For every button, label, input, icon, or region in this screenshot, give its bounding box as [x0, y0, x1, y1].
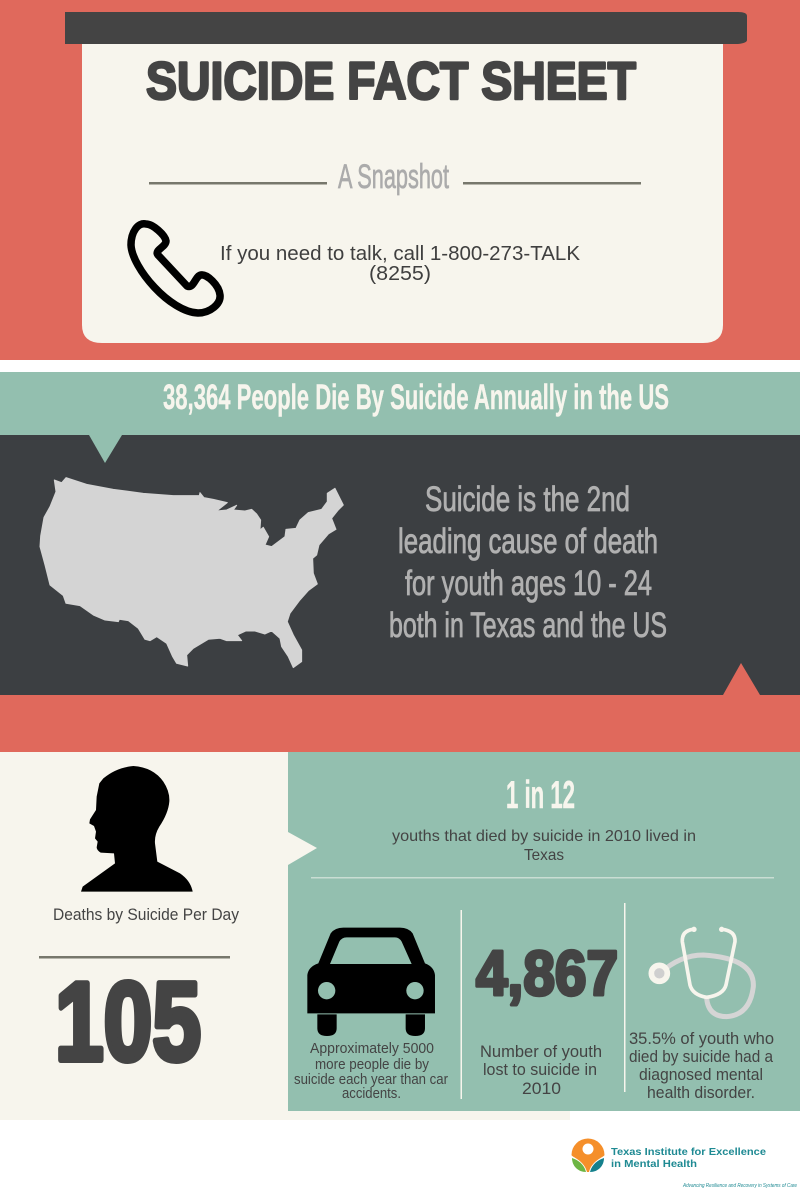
mental health text: health disorder.	[647, 1084, 755, 1102]
icon: head silhouette	[81, 766, 193, 892]
deaths per day label: Deaths by Suicide Per Day	[53, 905, 239, 924]
panel: Texas statistics	[288, 752, 800, 1111]
helpline text: If you need to talk, call 1-800-273-TALK	[220, 243, 581, 265]
leading cause text: both in Texas and the US	[389, 606, 667, 645]
car accidents text: suicide each year than car	[294, 1072, 448, 1088]
leading cause text: Suicide is the 2nd	[425, 480, 630, 519]
helpline text: (8255)	[369, 263, 431, 285]
panel: header	[0, 0, 800, 360]
divider band with pointer	[0, 663, 800, 752]
number: 4,867: 4,867	[476, 939, 618, 1009]
youth lost text: lost to suicide in	[483, 1061, 597, 1079]
car accidents text: accidents.	[342, 1086, 401, 1102]
panel: leading cause	[0, 435, 800, 695]
panel: deaths per day	[0, 752, 570, 1120]
leading cause text: leading cause of death	[398, 522, 658, 561]
mental health text	[629, 1030, 774, 1102]
Texas statistic text: Texas	[524, 847, 564, 864]
Texas statistic text: youths that died by suicide in 2010 lived in	[392, 828, 696, 845]
icon: stethoscope	[651, 927, 753, 1017]
header card	[82, 40, 723, 343]
banner pointer	[89, 435, 122, 463]
youth lost text: Number of youth	[480, 1043, 602, 1061]
number: 105: 105	[55, 960, 201, 1084]
mental health text: 35.5% of youth who	[629, 1030, 774, 1048]
logo: Texas Institute for Excellence in Mental Health	[572, 1138, 797, 1189]
section pointer	[288, 832, 317, 865]
icon: telephone	[131, 224, 220, 313]
youth lost text	[480, 1043, 602, 1098]
subtitle with rules: A Snapshot	[338, 158, 449, 196]
logo: Texas Institute for Excellence in Mental Health: in Mental Health	[611, 1158, 697, 1170]
car accidents text: more people die by	[315, 1057, 430, 1073]
header top bar	[65, 12, 747, 44]
Texas statistic text	[392, 828, 696, 864]
leading cause text	[389, 480, 667, 645]
mental health text: died by suicide had a	[629, 1048, 774, 1066]
youth lost text: 2010	[522, 1080, 561, 1098]
logo: Texas Institute for Excellence in Mental Health: Texas Institute for Excellence	[611, 1146, 766, 1158]
number: 1 in 12: 1 in 12	[506, 774, 575, 817]
icon: car	[307, 928, 435, 1036]
title: SUICIDE FACT SHEET	[146, 52, 636, 111]
panel: national statistic banner	[0, 372, 800, 435]
map: United States	[40, 478, 343, 668]
helpline text	[220, 243, 581, 285]
leading cause text: for youth ages 10 - 24	[405, 564, 652, 603]
car accidents text	[294, 1041, 448, 1102]
mental health text: diagnosed mental	[639, 1066, 763, 1084]
car accidents text: Approximately 5000	[310, 1041, 434, 1057]
